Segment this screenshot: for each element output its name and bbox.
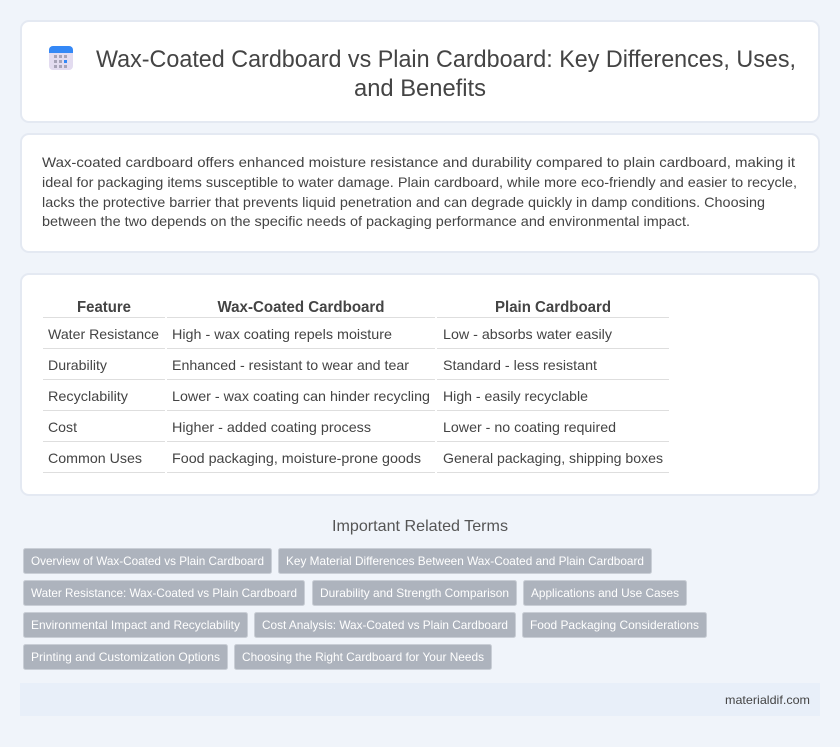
table row: cost	[48, 419, 616, 435]
table row: common uses: Common Uses	[48, 450, 142, 466]
panel: comparison table	[21, 274, 819, 495]
related term chips: Applications and Use Cases	[531, 586, 679, 600]
related term chips: Overview of Wax-Coated vs Plain Cardboard	[31, 554, 264, 568]
table row: common uses: General packaging, shipping boxes	[443, 450, 663, 466]
title: and Benefits	[354, 75, 486, 102]
table row: water resistance: Water Resistance	[48, 326, 159, 342]
table row: durability	[48, 357, 597, 373]
related term chips: Cost Analysis: Wax-Coated vs Plain Cardboard	[262, 618, 508, 632]
icon: calendar	[49, 46, 73, 70]
table header	[77, 299, 611, 316]
heading: related terms: Important Related Terms	[332, 518, 508, 535]
table row: common uses: Food packaging, moisture-prone goods	[172, 450, 421, 466]
panel: header	[21, 21, 819, 122]
footer	[20, 683, 820, 716]
text block: summary paragraph: lacks the protective barrier that prevents liquid penetration and can degrade quickly in damp conditions. Choosing	[42, 194, 765, 210]
related term chips: Printing and Customization Options	[31, 650, 220, 664]
table row: durability: Standard - less resistant	[443, 357, 597, 373]
related term chips: Durability and Strength Comparison	[320, 586, 509, 600]
table header: Feature	[77, 299, 131, 316]
related term chips: Food Packaging Considerations	[530, 618, 699, 632]
title: Wax-Coated Cardboard vs Plain Cardboard: Key Differences, Uses,	[96, 46, 796, 73]
title	[96, 46, 796, 102]
table row: water resistance: High - wax coating repels moisture	[172, 326, 392, 342]
text block: summary paragraph: Wax-coated cardboard offers enhanced moisture resistance and durability compared to plain cardboard, making it	[42, 154, 795, 170]
related term chips: Choosing the Right Cardboard for Your Needs	[242, 650, 484, 664]
table row: recyclability: Lower - wax coating can hinder recycling	[172, 388, 430, 404]
related term chips: Key Material Differences Between Wax-Coated and Plain Cardboard	[286, 554, 644, 568]
table row: water resistance: Low - absorbs water easily	[443, 326, 612, 342]
related term chips: Environmental Impact and Recyclability	[31, 618, 240, 632]
table row: recyclability	[48, 388, 588, 404]
table row: durability: Enhanced - resistant to wear and tear	[172, 357, 409, 373]
table row: recyclability: High - easily recyclable	[443, 388, 588, 404]
panel: summary	[21, 134, 819, 252]
table row: durability: Durability	[48, 357, 107, 373]
table header: Plain Cardboard	[495, 299, 611, 316]
footer source text: materialdif.com	[725, 693, 810, 707]
table row: recyclability: Recyclability	[48, 388, 128, 404]
table header: Wax-Coated Cardboard	[218, 299, 384, 316]
related term chips	[24, 548, 706, 670]
text block: summary paragraph	[42, 154, 797, 229]
table row: cost: Lower - no coating required	[443, 419, 616, 435]
related term chips: Water Resistance: Wax-Coated vs Plain Cardboard	[31, 586, 297, 600]
table row: water resistance	[48, 326, 612, 342]
table row: common uses	[48, 450, 663, 466]
text block: summary paragraph: between the two depends on the specific needs of packaging performance and environmental impact.	[42, 213, 690, 229]
text block: summary paragraph: ideal for packaging items susceptible to water damage. Plain cardboard, while more eco-friendly and easier to recycle,	[42, 174, 797, 190]
table row: cost: Higher - added coating process	[172, 419, 371, 435]
table row: cost: Cost	[48, 419, 77, 435]
